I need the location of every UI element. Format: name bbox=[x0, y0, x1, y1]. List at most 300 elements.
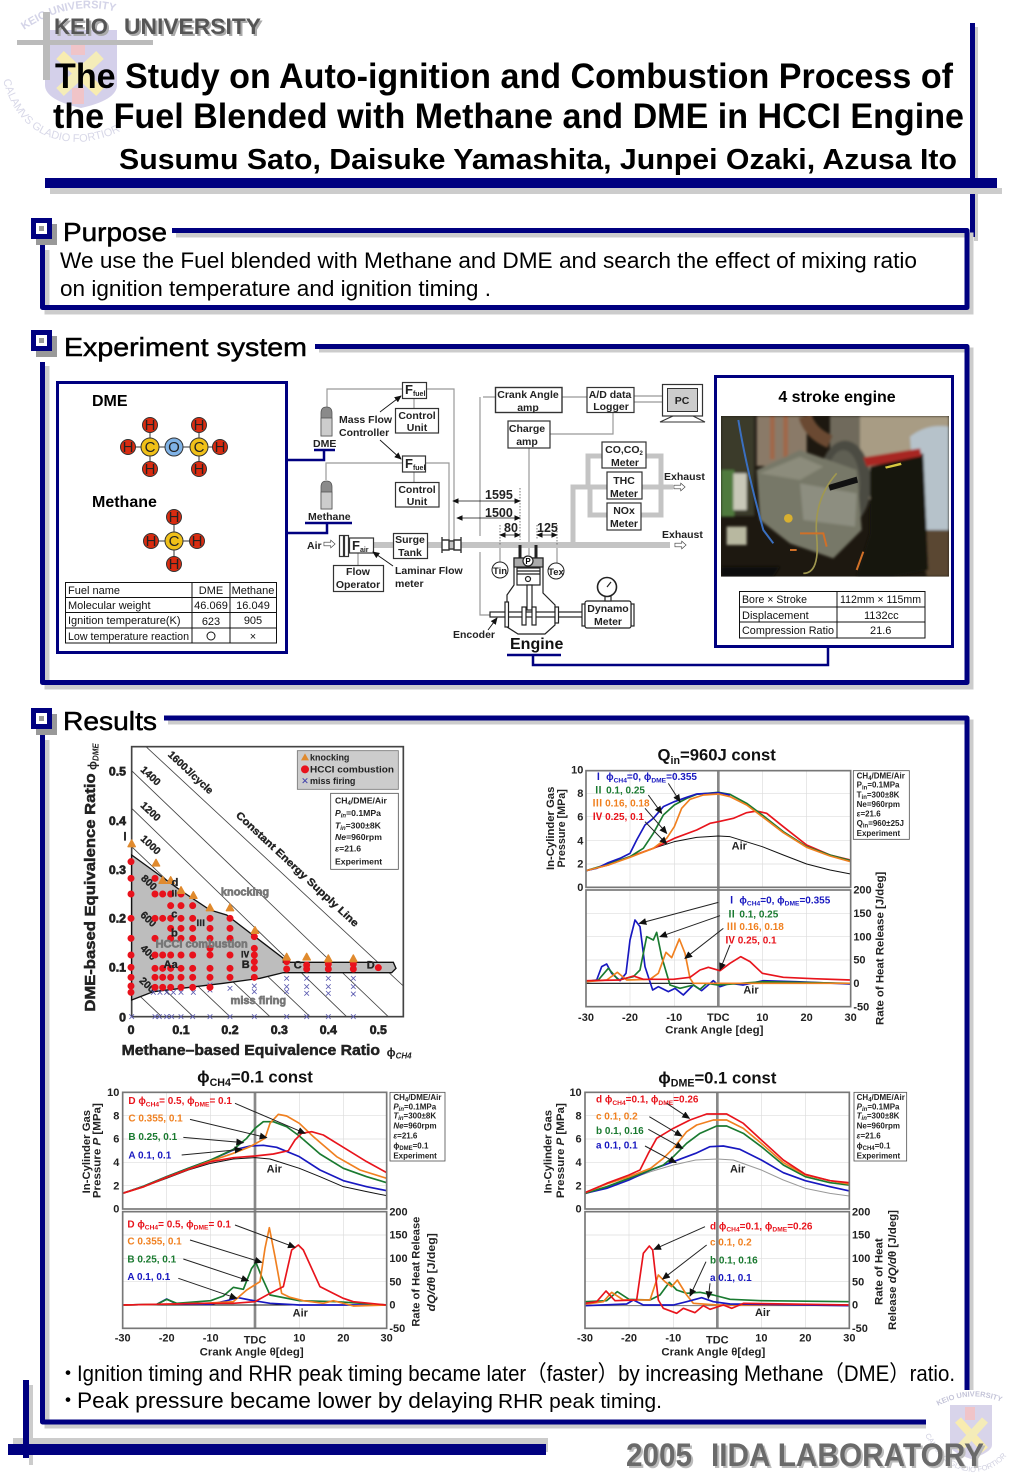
table: engine specs bbox=[740, 592, 925, 638]
info box: =960±25J bbox=[868, 819, 904, 828]
tick labels bbox=[569, 1087, 583, 1216]
conclusion bullets bbox=[57, 1361, 955, 1413]
dynamo meter bbox=[582, 578, 634, 628]
series labels: heat release: CH4 bbox=[726, 1227, 740, 1234]
chart: Qin=960J const: Crank Angle [deg] bbox=[665, 1024, 764, 1036]
series labels: pressure: =0.26 bbox=[673, 1095, 699, 1106]
chart: phi DME=0.1 const bbox=[543, 1068, 907, 1359]
info box: T bbox=[335, 820, 341, 830]
molecule: DME: H bbox=[215, 439, 225, 456]
panel: results bbox=[31, 706, 971, 1426]
region labels: HCCI combustion bbox=[156, 938, 248, 950]
schematic: engine test rig: Exhaust bbox=[662, 529, 703, 541]
schematic: engine test rig: Tin bbox=[493, 566, 507, 577]
legend bbox=[297, 751, 398, 789]
molecule: methane: H bbox=[192, 533, 202, 550]
dimensions: 125 bbox=[537, 521, 558, 535]
series labels: heat release: DME bbox=[772, 1227, 788, 1234]
chart: Qin=960J const: 100 bbox=[853, 931, 872, 943]
molecule: DME: O bbox=[168, 439, 180, 456]
chart: operating map: DME bbox=[91, 743, 100, 761]
temperature sensors bbox=[500, 548, 557, 563]
chart: phi DME=0.1 const: -20 bbox=[621, 1333, 637, 1345]
series labels: pressure: =0.1, ϕ bbox=[626, 1095, 659, 1106]
series labels: heat release bbox=[127, 1219, 231, 1283]
info box: T bbox=[857, 1111, 863, 1120]
chart: operating map: 800 bbox=[138, 873, 159, 893]
info box: CH bbox=[393, 1093, 405, 1102]
tick labels: 4 bbox=[113, 1157, 120, 1169]
chart: phi CH4=0.1 const: TDC bbox=[244, 1334, 266, 1346]
tick labels: 8 bbox=[576, 1110, 582, 1122]
info box: P bbox=[857, 781, 862, 790]
chart: phi DME=0.1 const: 200 bbox=[852, 1206, 870, 1218]
tick labels: 2 bbox=[113, 1180, 119, 1192]
info box bbox=[854, 1092, 907, 1161]
point labels: Ⅳ bbox=[241, 949, 250, 959]
series labels: heat release: =0.1, ϕ bbox=[740, 1221, 773, 1232]
schematic: engine test rig: Tex bbox=[548, 567, 565, 578]
university name: UNIVERSITY bbox=[126, 16, 263, 41]
schematic: engine test rig: Control bbox=[398, 484, 436, 496]
conclusion bullets: ・ bbox=[57, 1361, 79, 1386]
chart: Qin=960J const: In-Cylinder Gas bbox=[545, 787, 557, 870]
table: fuel properties: 46.069 bbox=[194, 600, 228, 612]
series labels: pressure: B 0.25, 0.1 bbox=[128, 1132, 178, 1143]
conclusion bullets: Peak pressure became lower by delaying bbox=[77, 1388, 493, 1413]
schematic: engine test rig: F bbox=[405, 456, 413, 471]
chart: phi DME=0.1 const: 0 bbox=[852, 1300, 858, 1312]
logo watermark: bottom right: KEIO UNIVERSITY bbox=[936, 1391, 1003, 1406]
molecule: methane: H bbox=[146, 533, 156, 550]
axis labels: 0.3 bbox=[109, 863, 126, 877]
chart: phi DME=0.1 const: TDC bbox=[706, 1334, 729, 1346]
tick labels: 0 bbox=[576, 1204, 582, 1216]
chart: Qin=960J const: -10 bbox=[666, 1012, 682, 1024]
series labels: pressure bbox=[128, 1096, 232, 1161]
schematic: engine test rig: DME bbox=[313, 438, 336, 450]
schematic: engine test rig: THC bbox=[613, 475, 635, 487]
chart: phi DME=0.1 const: Pressure P [MPa] bbox=[555, 1103, 567, 1198]
panel: purpose bbox=[31, 217, 971, 312]
info box: =300±8K bbox=[404, 1111, 436, 1120]
info box: in bbox=[863, 824, 869, 830]
schematic: engine test rig: Laminar Flow bbox=[395, 565, 464, 577]
series labels: pressure: DME bbox=[195, 1101, 210, 1108]
series labels: heat release: =0.26 bbox=[787, 1221, 813, 1232]
purpose text: on ignition temperature and ignition timing . bbox=[60, 276, 491, 301]
info box: =0.1 bbox=[875, 1141, 891, 1150]
series labels: pressure: D ϕ bbox=[128, 1096, 146, 1107]
chart: operating map: CH4 bbox=[396, 1051, 412, 1060]
info box: /DME/Air bbox=[872, 1093, 905, 1102]
chart: Qin=960J const: 150 bbox=[853, 908, 872, 920]
info box: Experiment bbox=[335, 856, 382, 866]
series labels: heat release: D ϕ bbox=[127, 1219, 145, 1230]
info box: =300±8K bbox=[346, 820, 382, 830]
series labels: pressure: Ⅳ 0.25, 0.1 bbox=[592, 812, 644, 823]
PC bbox=[660, 384, 705, 422]
heading: purpose: Purpose bbox=[63, 217, 167, 247]
schematic: engine test rig: amp bbox=[516, 436, 538, 448]
info box: CH4 bbox=[863, 1146, 875, 1152]
tick labels: 6 bbox=[113, 1134, 119, 1146]
chart: operating map: ϕ bbox=[387, 1046, 396, 1060]
logo watermark: top left bbox=[4, 0, 120, 142]
info box: in bbox=[399, 1107, 404, 1113]
series labels: pressure: a 0.1, 0.1 bbox=[596, 1140, 638, 1151]
info box: in bbox=[862, 795, 867, 801]
chart: Qin=960J const: Air bbox=[743, 984, 759, 996]
purpose text bbox=[60, 248, 917, 301]
axis labels: 0.2 bbox=[221, 1023, 239, 1037]
info box: 4 bbox=[405, 1098, 409, 1104]
info box: P bbox=[335, 808, 341, 818]
info box: =0.1 bbox=[413, 1141, 429, 1150]
conclusion bullets: RHR peak timing. bbox=[498, 1391, 662, 1413]
molecule: DME: C bbox=[194, 439, 205, 456]
series labels: heat release: = 0.5, ϕ bbox=[158, 1219, 194, 1230]
molecule: DME: H bbox=[194, 461, 204, 478]
logo area mask bbox=[926, 1390, 1024, 1479]
pressure curves bbox=[586, 792, 851, 874]
schematic: engine test rig: F bbox=[352, 538, 360, 553]
footer rules bbox=[8, 1380, 548, 1465]
chart: phi CH4=0.1 const: Pressure P [MPa] bbox=[92, 1103, 104, 1198]
series labels: heat release: DME bbox=[785, 901, 800, 908]
series labels: heat release bbox=[725, 895, 831, 946]
chart: Qin=960J const: 200 bbox=[853, 885, 872, 897]
region labels: knocking bbox=[221, 886, 269, 898]
series labels: pressure: C 0.355, 0.1 bbox=[128, 1114, 183, 1125]
point labels: d bbox=[172, 877, 178, 889]
info box: ε=21.6 bbox=[857, 810, 881, 819]
info box: ε=21.6 bbox=[393, 1131, 418, 1140]
series labels: pressure: = 0.5, ϕ bbox=[159, 1096, 195, 1107]
PC: PC bbox=[675, 395, 690, 407]
chart: phi DME=0.1 const: In-Cylinder Gas bbox=[543, 1110, 555, 1193]
table: fuel properties: Low temperature reaction bbox=[68, 631, 189, 643]
exhaust and intake pipes bbox=[373, 456, 673, 545]
series labels: heat release: CH4 bbox=[145, 1225, 158, 1232]
chart: phi DME=0.1 const: Air bbox=[730, 1163, 746, 1175]
dimensions: 80 bbox=[504, 521, 518, 535]
tick labels: 10 bbox=[571, 765, 583, 777]
table: fuel properties: DME bbox=[199, 585, 223, 597]
point labels: Ⅲ bbox=[196, 918, 205, 928]
chart: phi DME=0.1 const: 20 bbox=[799, 1333, 811, 1345]
molecule: DME: C bbox=[145, 439, 156, 456]
chart: phi DME=0.1 const: 50 bbox=[852, 1276, 864, 1288]
info box: in bbox=[340, 826, 346, 832]
table: engine specs: Compression Ratio bbox=[742, 625, 834, 637]
point labels bbox=[119, 832, 375, 971]
series labels: heat release: B 0.25, 0.1 bbox=[127, 1254, 177, 1265]
series labels: heat release: a 0.1, 0.1 bbox=[710, 1273, 752, 1284]
info box: /DME/Air bbox=[408, 1093, 442, 1102]
molecule: DME: H bbox=[145, 461, 155, 478]
tick labels: 8 bbox=[113, 1110, 119, 1122]
info box: P bbox=[857, 1102, 863, 1111]
axis labels: 0.4 bbox=[109, 814, 126, 828]
series labels: pressure: DME bbox=[651, 777, 667, 784]
footer: laboratory name: IIDA LABORATORY bbox=[711, 1437, 984, 1473]
header rules bbox=[45, 23, 1002, 241]
table: engine specs: 21.6 bbox=[870, 625, 891, 637]
info box: =300±8K bbox=[867, 1111, 900, 1120]
schematic: engine test rig: Exhaust bbox=[664, 471, 705, 483]
molecule: DME bbox=[120, 417, 228, 478]
axis labels: 0 bbox=[128, 1023, 135, 1037]
axis labels: 0.4 bbox=[320, 1023, 337, 1037]
tick labels: 2 bbox=[577, 859, 583, 871]
pressure curves bbox=[123, 1114, 387, 1196]
chart title: CH4 bbox=[210, 1077, 231, 1089]
chart title: =960J const bbox=[680, 746, 776, 765]
info box: 4 bbox=[868, 1098, 872, 1104]
schematic: engine test rig: Meter bbox=[610, 518, 638, 530]
chart: phi DME=0.1 const: 30 bbox=[843, 1333, 855, 1345]
info box: ε=21.6 bbox=[335, 844, 361, 854]
heat release curves bbox=[585, 1246, 849, 1313]
info box: T bbox=[393, 1111, 399, 1120]
series labels: heat release: d ϕ bbox=[710, 1221, 726, 1232]
chart: operating map: 200 bbox=[137, 976, 157, 996]
info box: DME bbox=[399, 1146, 413, 1152]
region labels bbox=[156, 886, 286, 1007]
axis labels: 0.1 bbox=[109, 961, 126, 975]
table: fuel properties bbox=[66, 582, 276, 643]
tick labels: 8 bbox=[577, 788, 583, 800]
info box: in bbox=[862, 1107, 868, 1113]
info box: CH bbox=[857, 1093, 868, 1102]
schematic: engine test rig: amp bbox=[517, 402, 539, 414]
series labels: pressure: CH4 bbox=[612, 1100, 626, 1107]
chart: Qin=960J const bbox=[545, 746, 909, 1036]
point labels: c bbox=[171, 908, 177, 920]
info box: Ne=960rpm bbox=[857, 1121, 900, 1130]
series labels: pressure: DME bbox=[658, 1100, 674, 1107]
schematic: engine test rig: air bbox=[360, 547, 369, 554]
table: engine specs: 1132cc bbox=[864, 610, 899, 622]
chart: Qin=960J const: 10 bbox=[756, 1012, 768, 1024]
chart: phi DME=0.1 const: Rate of Heat bbox=[874, 1238, 886, 1305]
schematic: engine test rig: Flow bbox=[346, 566, 371, 578]
schematic: engine test rig: fuel bbox=[413, 465, 425, 472]
schematic: engine test rig: Operator bbox=[336, 579, 380, 591]
schematic: engine test rig: ⇨ bbox=[674, 538, 687, 553]
info box: in bbox=[862, 1116, 867, 1122]
schematic: engine test rig: Air bbox=[307, 540, 322, 552]
chart: operating map: ϕ bbox=[86, 761, 100, 770]
chart title: =0.1 const bbox=[694, 1068, 777, 1087]
chart: Qin=960J const: 20 bbox=[801, 1012, 813, 1024]
schematic: engine test rig: Methane bbox=[308, 511, 351, 523]
series labels: pressure: d ϕ bbox=[596, 1095, 612, 1106]
schematic: engine test rig: Tank bbox=[398, 547, 422, 559]
series labels: pressure: Ⅲ 0.16, 0.18 bbox=[592, 799, 650, 810]
university name bbox=[54, 14, 263, 41]
heading: results: Results bbox=[63, 706, 157, 736]
chart: phi DME=0.1 const: 10 bbox=[755, 1333, 767, 1345]
info box: T bbox=[857, 790, 862, 799]
series labels: heat release: = 0.1 bbox=[208, 1219, 231, 1230]
schematic: engine test rig bbox=[307, 382, 705, 653]
chart title: ϕ bbox=[658, 1068, 671, 1087]
molecule: methane: H bbox=[169, 509, 179, 526]
conclusion bullets: Ignition timing and RHR peak timing became later（faster）by increasing Methane（DME）ratio. bbox=[77, 1361, 955, 1386]
chart: Qin=960J const: -20 bbox=[622, 1012, 638, 1024]
chart: phi CH4=0.1 const: -20 bbox=[159, 1333, 175, 1345]
chart: phi CH4=0.1 const: 200 bbox=[389, 1206, 408, 1218]
info box: 4 bbox=[348, 801, 352, 807]
data: knocking bbox=[128, 840, 357, 962]
purpose text: We use the Fuel blended with Methane and DME and search the effect of mixing ratio bbox=[60, 248, 917, 273]
schematic: engine test rig: Encoder bbox=[453, 629, 495, 641]
axis labels bbox=[109, 765, 387, 1037]
title: the Fuel Blended with Methane and DME in HCCI Engine bbox=[53, 97, 964, 136]
table: fuel properties: Ignition temperature(K) bbox=[68, 615, 180, 627]
info box: Experiment bbox=[857, 829, 900, 838]
info box: /DME/Air bbox=[872, 771, 905, 780]
info box: ϕ bbox=[393, 1141, 399, 1150]
series labels: pressure: =0, ϕ bbox=[627, 772, 652, 783]
chart: phi CH4=0.1 const: -30 bbox=[115, 1333, 131, 1345]
university name: KEIO bbox=[56, 16, 110, 41]
chart title: DME bbox=[671, 1078, 694, 1090]
schematic: engine test rig: Meter bbox=[610, 488, 638, 500]
schematic: engine test rig: P bbox=[525, 557, 531, 566]
region labels: miss firing bbox=[231, 995, 286, 1007]
molecule: methane: H bbox=[169, 556, 179, 573]
logo watermark: bottom right: CALAMVS GLADIO FORTIOR bbox=[926, 1434, 1006, 1472]
series labels: heat release: CH4 bbox=[747, 901, 761, 908]
university name: KEIO bbox=[54, 14, 108, 39]
chart: phi DME=0.1 const: Air bbox=[755, 1307, 771, 1319]
footer: laboratory name: 2005 bbox=[626, 1437, 692, 1473]
gas supply piping bbox=[326, 389, 662, 615]
info box: Ne=960rpm bbox=[393, 1121, 437, 1130]
axis labels: 0.3 bbox=[271, 1023, 288, 1037]
info box: Ne=960rpm bbox=[335, 832, 382, 842]
info box: Ne=960rpm bbox=[857, 800, 900, 809]
chart: phi CH4=0.1 const: 50 bbox=[389, 1276, 402, 1288]
dimensions: 1595 bbox=[485, 488, 513, 502]
series labels: heat release: =0, ϕ bbox=[760, 895, 785, 906]
tick labels: 6 bbox=[576, 1134, 582, 1146]
dimensions: 1500 bbox=[485, 506, 513, 520]
chart: phi DME=0.1 const: Release dQ/dθ [J/deg] bbox=[887, 1210, 899, 1330]
tick labels: 4 bbox=[576, 1157, 583, 1169]
tick labels: 4 bbox=[577, 835, 584, 847]
table: fuel properties: 905 bbox=[244, 615, 262, 627]
engine bbox=[490, 545, 585, 634]
axis labels: 0.2 bbox=[109, 912, 126, 926]
point labels: D bbox=[367, 959, 375, 971]
tick labels bbox=[571, 765, 584, 894]
chart: operating map: Constant Energy Supply Line bbox=[233, 810, 360, 930]
flow controller boxes bbox=[334, 382, 439, 592]
info box: in bbox=[341, 814, 346, 820]
schematic: engine test rig: Engine bbox=[510, 636, 563, 653]
chart: operating map: 400 bbox=[138, 943, 158, 963]
chart: phi DME=0.1 const: -30 bbox=[577, 1333, 593, 1345]
molecule: methane: C bbox=[169, 533, 180, 550]
info box: P bbox=[393, 1102, 399, 1111]
chart: phi CH4=0.1 const: Air bbox=[267, 1164, 283, 1176]
molecule: DME: H bbox=[145, 417, 155, 434]
logo watermark: bottom right bbox=[926, 1391, 1006, 1472]
connector lines bbox=[287, 450, 828, 665]
schematic: engine test rig: CO,CO bbox=[605, 444, 640, 456]
point labels: Ⅱ bbox=[170, 889, 179, 899]
series labels: pressure: c 0.1, 0.2 bbox=[596, 1111, 638, 1122]
engine photo bbox=[721, 416, 949, 577]
chart: phi CH4=0.1 const: -50 bbox=[389, 1323, 405, 1335]
table: fuel properties: Methane bbox=[232, 585, 274, 597]
chart: operating map: 1600J/cycle bbox=[165, 750, 215, 797]
chart: operating map: Methane–based Equivalence Ratio bbox=[122, 1043, 380, 1059]
chart: phi CH4=0.1 const: 100 bbox=[389, 1253, 408, 1265]
chart: operating map: 1400 bbox=[138, 765, 162, 789]
panel: 4 stroke engine: 4 stroke engine bbox=[778, 389, 896, 406]
info box: =0.1MPa bbox=[867, 1102, 900, 1111]
pressure curves bbox=[585, 1114, 849, 1196]
authors: Susumu Sato, Daisuke Yamashita, Junpei Ozaki, Azusa Ito bbox=[119, 144, 957, 176]
tick labels: 10 bbox=[107, 1087, 119, 1099]
info box: Experiment bbox=[393, 1151, 437, 1160]
header decorative cross bbox=[17, 12, 153, 80]
chart: phi CH4=0.1 const: Crank Angle θ[deg] bbox=[200, 1347, 304, 1359]
university name: UNIVERSITY bbox=[124, 14, 261, 39]
info box: =0.1MPa bbox=[404, 1102, 437, 1111]
series labels: pressure: CH4 bbox=[614, 777, 627, 784]
gas cylinders bbox=[321, 407, 332, 509]
schematic: engine test rig: Logger bbox=[593, 401, 629, 413]
table: fuel properties: 16.049 bbox=[236, 600, 270, 612]
chart: phi CH4=0.1 const: 0 bbox=[389, 1300, 395, 1312]
schematic: engine test rig: Dynamo bbox=[587, 603, 629, 615]
schematic: engine test rig: Control bbox=[398, 410, 436, 422]
schematic: engine test rig: fuel bbox=[413, 391, 425, 398]
point labels: B bbox=[242, 959, 250, 971]
data: HCCI combustion bbox=[128, 859, 381, 995]
chart: Qin=960J const: TDC bbox=[707, 1012, 730, 1024]
flow arrows bbox=[373, 396, 497, 630]
tick labels bbox=[107, 1087, 120, 1216]
logo watermark: top left: CALAMVS GLADIO FORTIOR bbox=[4, 79, 120, 142]
footer: laboratory name bbox=[626, 1437, 986, 1475]
chart: phi DME=0.1 const: 100 bbox=[852, 1253, 870, 1265]
axis labels: 0.5 bbox=[370, 1023, 387, 1037]
chart: operating map: DME-based Equivalence Ratio bbox=[83, 773, 99, 1012]
chart title: ϕ bbox=[197, 1068, 210, 1087]
series labels: heat release: Ⅱ 0.1, 0.25 bbox=[727, 909, 779, 920]
chart: phi CH4=0.1 const: dQ/dθ [J/deg] bbox=[426, 1233, 438, 1311]
series labels: heat release: b 0.1, 0.16 bbox=[710, 1255, 758, 1266]
info box bbox=[331, 793, 398, 869]
tick labels: 2 bbox=[576, 1180, 582, 1192]
info box: CH bbox=[857, 771, 868, 780]
tick labels: 10 bbox=[569, 1087, 582, 1099]
series labels: pressure: b 0.1, 0.16 bbox=[596, 1126, 644, 1137]
molecule: methane bbox=[144, 509, 204, 573]
info box bbox=[853, 771, 909, 839]
chart title: in bbox=[670, 755, 680, 767]
chart: Qin=960J const: Air bbox=[732, 840, 748, 852]
info box: ε=21.6 bbox=[857, 1131, 881, 1140]
chart: phi CH4=0.1 const: -10 bbox=[203, 1333, 219, 1345]
